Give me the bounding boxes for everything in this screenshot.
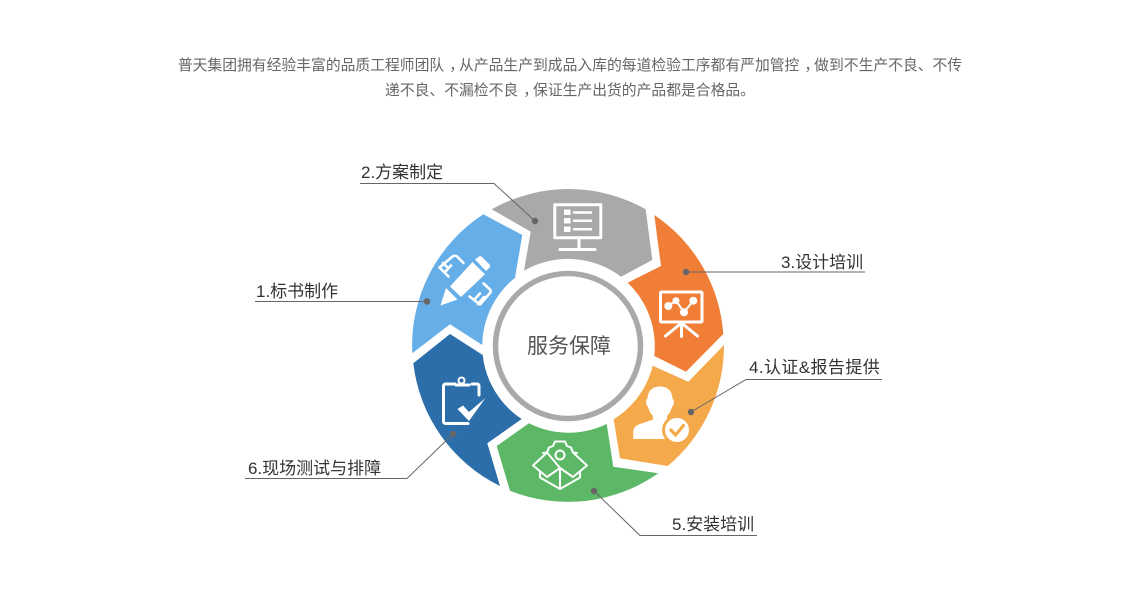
- icon: monitor with list: [555, 205, 601, 250]
- icon: person with check badge: [633, 386, 691, 444]
- segment 5: installation training (green): [497, 423, 658, 502]
- center title: 服务保障: [527, 335, 611, 358]
- intro text: 递不良、不漏检不良 ，保证生产出货的产品都是合格品。: [385, 83, 755, 99]
- label 5: [591, 488, 757, 536]
- label 1: [255, 282, 430, 305]
- label 6: [245, 431, 456, 478]
- label 4: [688, 358, 882, 415]
- label 1: 1.标书制作: [256, 282, 338, 301]
- label 3: 3.设计培训: [781, 253, 863, 272]
- label 3: [683, 253, 865, 275]
- label 2: 2.方案制定: [361, 163, 443, 182]
- label 2: [360, 163, 538, 224]
- segment 2: scheme planning (gray): [492, 189, 652, 277]
- segment 1: tender document (light blue): [412, 214, 522, 353]
- icon: clipboard with check: [444, 378, 486, 424]
- icon: presentation board: [660, 292, 702, 336]
- label 6: 6.现场测试与排障: [248, 459, 381, 478]
- segment 4: certification and report (light orange): [614, 345, 724, 466]
- label 5: 5.安装培训: [672, 515, 754, 534]
- label 4: 4.认证&报告提供: [749, 358, 880, 377]
- icon: pencil and ruler: [440, 256, 491, 306]
- center ring: [496, 274, 640, 418]
- icon: box with gear: [533, 442, 587, 489]
- segment 3: design training (orange): [628, 215, 723, 372]
- intro text: [178, 57, 962, 99]
- segment 6: on-site testing (dark blue): [413, 334, 522, 486]
- intro text: 普天集团拥有经验丰富的品质工程师团队 ，从产品生产到成品入库的每道检验工序都有严加管控 ，做到不生产不良、不传: [178, 58, 962, 74]
